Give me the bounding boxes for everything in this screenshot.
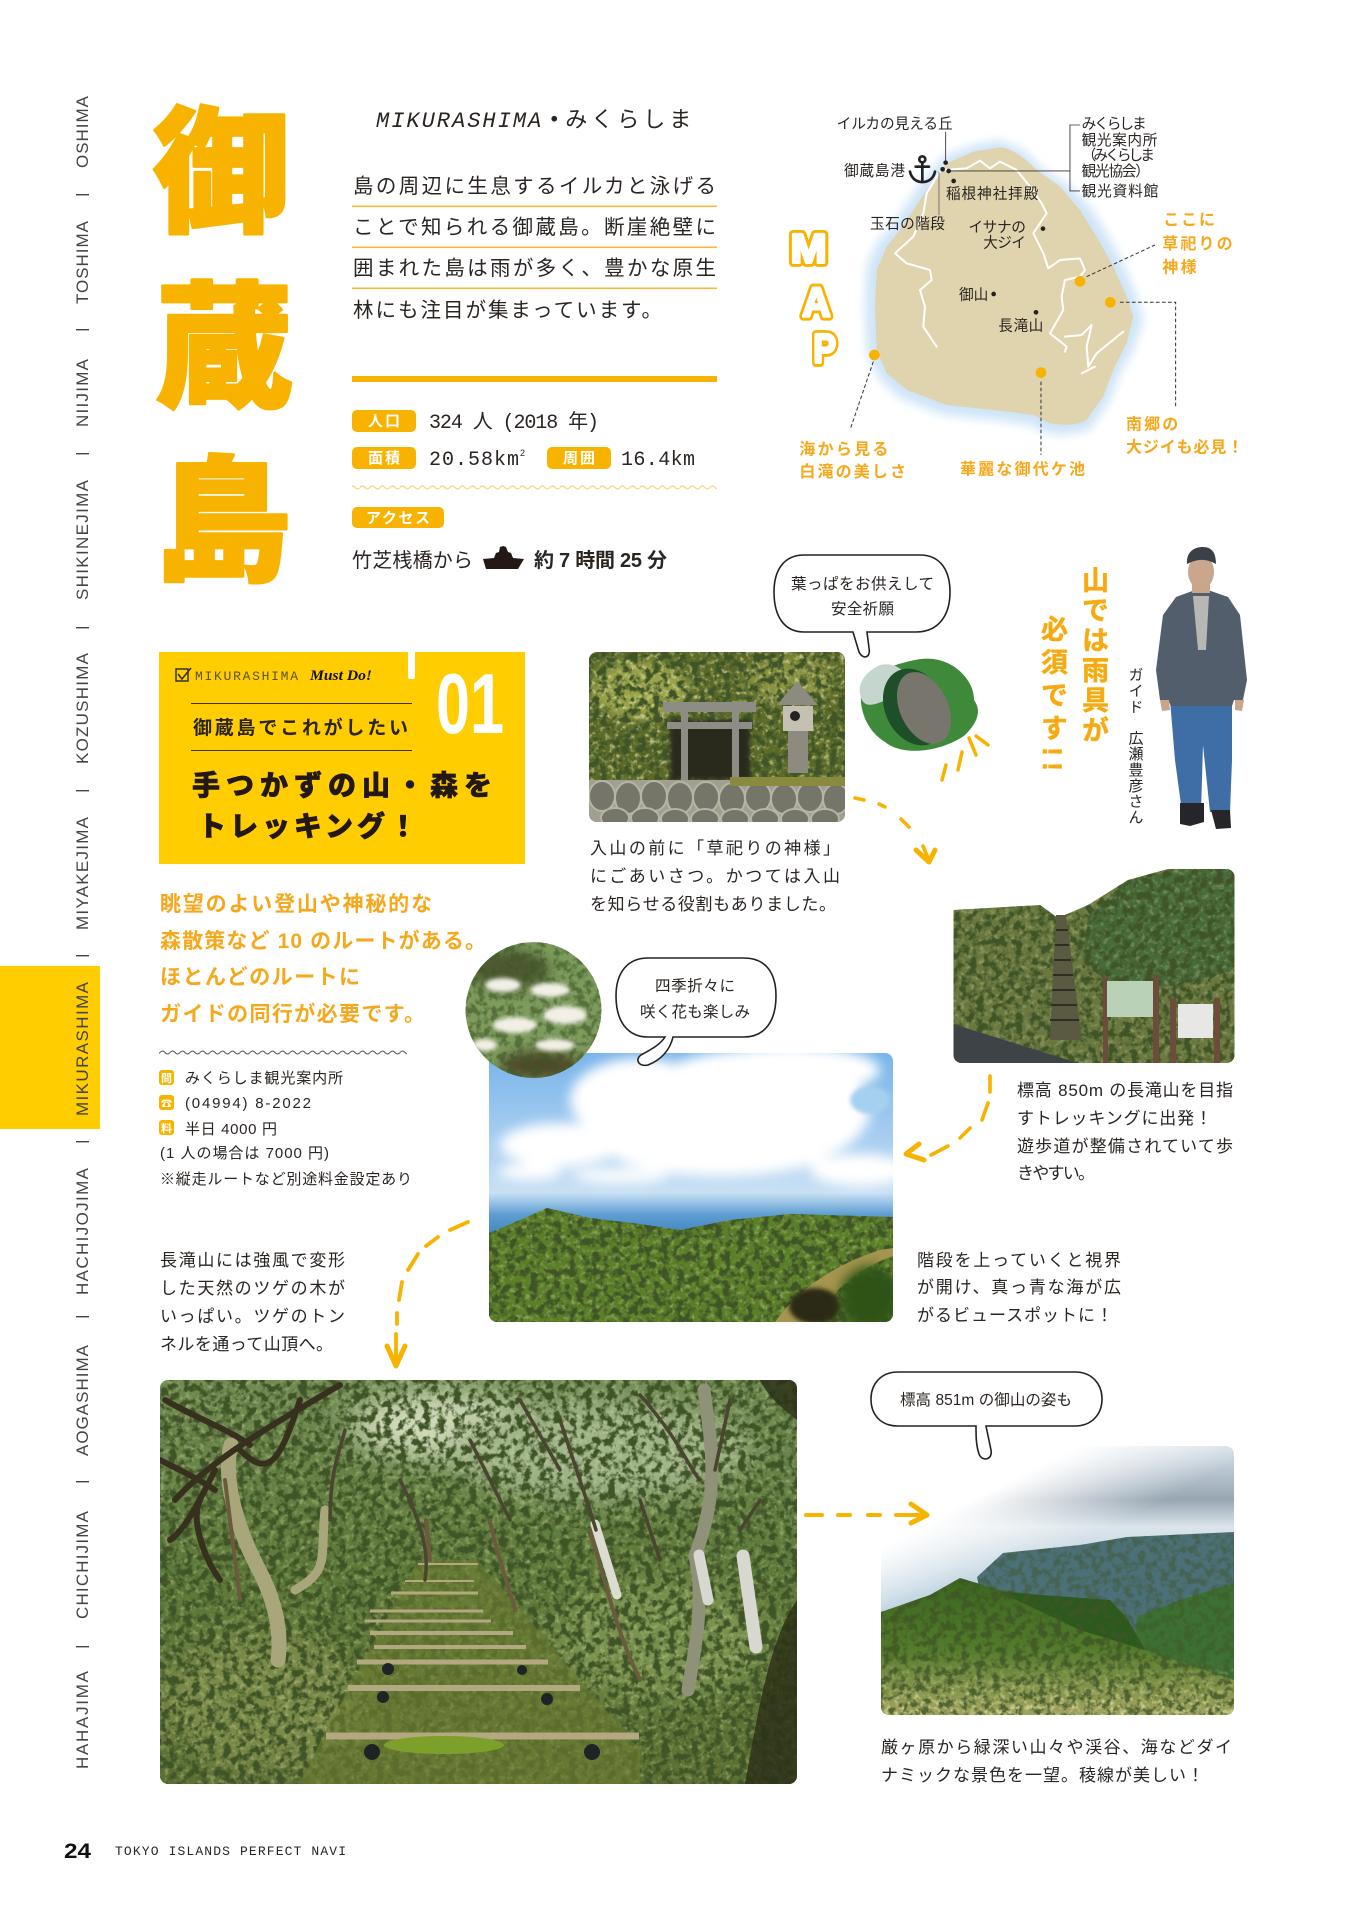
caption: sea view: が開け、真っ青な海が広: [917, 1278, 1121, 1297]
badge: population: [352, 410, 416, 432]
map: highlighted spots: 華麗な御代ケ池: [960, 460, 1085, 478]
map: island: [875, 147, 1133, 425]
access: 竹芝桟橋から: [352, 549, 473, 572]
arrow: stairs to sea view: [906, 1076, 990, 1160]
title: 御蔵島: 御: [153, 98, 289, 250]
intro text block: 囲まれた島は雨が多く、豊かな原生: [353, 257, 716, 280]
sidebar: island index: SHIKINEJIMA: [73, 479, 92, 600]
map: highlighted spots: 草祀りの: [1162, 235, 1233, 253]
sidebar: island index: HACHIJOJIMA: [73, 1167, 92, 1295]
caption: shrine: [590, 839, 840, 914]
caption: stairs: 標高 850m の長滝山を目指: [1017, 1081, 1233, 1100]
sidebar: island index: OSHIMA: [73, 95, 92, 168]
icon: checkbox: [176, 668, 191, 681]
caption: mountain: 厳ヶ原から緑深い山々や渓谷、海などダイ: [881, 1738, 1232, 1757]
map: highlighted spots: [799, 212, 1243, 481]
map: MAP lettering: M: [791, 226, 827, 272]
speech bubble: offering: 安全祈願: [831, 600, 894, 618]
tree trunks: [160, 1385, 760, 1690]
map: spot dots: [869, 276, 1116, 378]
sidebar: island index: CHICHIJIMA: [73, 1510, 92, 1619]
guide name: ガイド 広瀬豊彦さん: [1126, 667, 1144, 825]
caption: boxwood tunnel: いっぱい。ツゲのトン: [160, 1307, 345, 1326]
map: place labels: 御蔵島港: [844, 162, 905, 179]
handwritten note: 必須です!!: [1037, 615, 1068, 777]
stairs: [300, 1560, 640, 1784]
info block: みくらしま観光案内所: [185, 1070, 343, 1087]
map: place labels: イサナの: [968, 220, 1026, 236]
map: MAP lettering: P: [813, 326, 836, 372]
panel: Must Do header: MIKURASHIMA: [195, 669, 298, 684]
info block: 半日 4000 円: [185, 1121, 277, 1138]
facts: population, area, circumference: 20.58km: [429, 449, 519, 472]
badge: population: 人口: [368, 413, 400, 430]
map: place labels: [837, 116, 1158, 335]
panel: Must Do header: Must Do!: [309, 668, 372, 684]
caption: stairs: [1017, 1081, 1233, 1183]
info block: (1 人の場合は 7000 円): [160, 1145, 329, 1162]
intro text block: ことで知られる御蔵島。断崖絶壁に: [353, 216, 716, 239]
map: highlighted spots: 大ジイも必見！: [1126, 439, 1243, 457]
number 01: 01: [436, 657, 504, 752]
map: place labels: 観光資料館: [1082, 183, 1158, 200]
title: 御蔵島: [153, 98, 293, 599]
map: place labels: （みくらしま: [1082, 147, 1155, 164]
facts: population, area, circumference: 2: [520, 448, 525, 458]
caption: stairs: きやすい。: [1017, 1164, 1095, 1183]
icon: fee: [159, 1120, 174, 1135]
badge: circumference: 周囲: [563, 450, 595, 467]
access: [352, 507, 667, 572]
map: place labels: 御山: [959, 286, 988, 303]
speech bubble: offering: [774, 555, 950, 657]
icon: ship: [483, 541, 524, 569]
title: 御蔵島: 蔵: [156, 273, 293, 425]
panel: Must Do header: 御蔵島でこれがしたい: [193, 716, 408, 739]
icon: phone: [159, 1095, 174, 1110]
badge: circumference: [547, 447, 611, 469]
badge: access: [352, 507, 444, 528]
handwritten note: 山では雨具が: [1078, 566, 1108, 746]
icon: phone: ☎: [161, 1098, 172, 1110]
caption: boxwood tunnel: ネルを通って山頂へ。: [160, 1335, 333, 1354]
map: MAP lettering: M: [791, 226, 827, 272]
photo: mountain ridge: [881, 1446, 1234, 1715]
sidebar current island highlight: [0, 966, 100, 1129]
caption: sea view: がるビュースポットに！: [917, 1306, 1113, 1325]
wavy divider: [352, 485, 717, 490]
caption: boxwood tunnel: [160, 1251, 345, 1354]
map: place labels: 大ジイ: [983, 235, 1026, 252]
lead text: ガイドの同行が必要です。: [160, 1002, 425, 1026]
caption: boxwood tunnel: 長滝山には強風で変形: [160, 1251, 345, 1270]
photo: shrine: [589, 652, 849, 829]
panel: Must Do header: トレッキング！: [198, 810, 417, 842]
speech bubble: flowers: 咲く花も楽しみ: [640, 1003, 750, 1021]
speech bubble: flowers: 四季折々に: [655, 977, 735, 995]
icon: inquiry: [159, 1070, 174, 1085]
photo: leaf and stone: [860, 658, 978, 756]
handwritten note: [1037, 566, 1108, 777]
map: MAP lettering: P: [813, 326, 836, 372]
icon: anchor: [910, 156, 935, 182]
map: highlighted spots: 南郷の: [1126, 415, 1178, 433]
access: 約 7 時間 25 分: [534, 549, 667, 572]
torii: [663, 702, 756, 780]
map: place labels: 稲根神社拝殿: [946, 186, 1039, 203]
panel: Must Do header: [159, 648, 525, 864]
intro text block: 島の周辺に生息するイルカと泳げる: [353, 175, 716, 198]
info block: (04994) 8-2022: [185, 1095, 311, 1112]
caption: sea view: 階段を上っていくと視界: [917, 1251, 1121, 1270]
lead text: 眺望のよい登山や神秘的な: [160, 893, 432, 916]
map: leader lines: [850, 125, 1176, 455]
map: MAP lettering: [791, 226, 836, 372]
subtitle: MIKURASHIMA・みくらしま: [376, 107, 695, 134]
info block: [159, 1070, 412, 1188]
stone wall: [589, 780, 845, 822]
map: place labels: 観光協会）: [1082, 163, 1150, 180]
sidebar: island index: AOGASHIMA: [73, 1344, 92, 1456]
map: place labels: 観光案内所: [1082, 132, 1158, 149]
caption: mountain: ナミックな景色を一望。稜線が美しい！: [881, 1766, 1204, 1785]
badge: access: アクセス: [366, 510, 430, 527]
lead text: [160, 893, 486, 1026]
caption: shrine: 入山の前に「草祀りの神様」: [590, 839, 840, 858]
intro text block: 林にも注目が集まっています。: [353, 299, 662, 322]
map: place labels: イルカの見える丘: [837, 116, 953, 133]
caption: sea view: [917, 1251, 1121, 1325]
caption: stairs: すトレッキングに出発！: [1017, 1109, 1212, 1128]
map: place labels: 玉石の階段: [870, 215, 945, 232]
photo: sea view: [489, 1046, 910, 1330]
footer: page number: 24: [64, 1840, 91, 1863]
map: sea glow: [865, 140, 1143, 435]
badge: area: 面積: [368, 449, 400, 467]
map: place labels: 長滝山: [998, 318, 1043, 335]
arrow: sea view to forest: [387, 1222, 468, 1366]
icon: inquiry: 問: [161, 1072, 172, 1085]
photo: flower: [465, 942, 602, 1079]
wavy divider: [159, 1050, 407, 1055]
facts: population, area, circumference: [352, 410, 695, 472]
sidebar: island index: MIKURASHIMA: [73, 981, 92, 1116]
map: [791, 116, 1243, 481]
sidebar: island index: MIYAKEJIMA: [73, 816, 92, 930]
footer: running title: TOKYO ISLANDS PERFECT NAVI: [115, 1844, 346, 1859]
map: highlighted spots: ここに: [1163, 212, 1215, 229]
arrow: shrine to stairs: [855, 798, 935, 862]
sidebar: island index: KOZUSHIMA: [73, 652, 92, 764]
map: place labels: みくらしま: [1082, 117, 1147, 133]
speech bubble: flowers: [616, 958, 776, 1065]
panel: Must Do header: 手つかずの山・森を: [192, 770, 492, 801]
sidebar: island index: HAHAJIMA: [73, 1670, 92, 1769]
icon: fee: 料: [161, 1121, 172, 1135]
speech bubble: mountain: [871, 1372, 1102, 1459]
map: highlighted spots: 神様: [1162, 257, 1197, 276]
arrow: forest to mountain: [806, 1504, 927, 1523]
thick divider: [352, 376, 717, 382]
sidebar: island index: [0, 95, 100, 1769]
sidebar: island index: TOSHIMA: [73, 220, 92, 304]
info block: ※縦走ルートなど別途料金設定あり: [160, 1171, 412, 1188]
caption: boxwood tunnel: した天然のツゲの木が: [160, 1279, 345, 1298]
sidebar: island index: NIIJIMA: [73, 358, 92, 427]
title: 御蔵島: 島: [155, 447, 291, 599]
map: highlighted spots: 海から見る: [799, 440, 888, 458]
caption: mountain: [881, 1738, 1232, 1785]
facts: population, area, circumference: 324 人 (2018 年): [429, 410, 599, 435]
map: highlighted spots: 白滝の美しさ: [799, 463, 906, 481]
stone lantern: [777, 681, 818, 773]
lead text: ほとんどのルートに: [160, 966, 360, 989]
caption: stairs: 遊歩道が整備されていて歩: [1017, 1137, 1233, 1156]
facts: population, area, circumference: 16.4km: [621, 449, 695, 472]
speech bubble: offering: 葉っぱをお供えして: [791, 575, 934, 593]
caption: shrine: を知らせる役割もありました。: [590, 895, 836, 914]
map: MAP lettering: A: [802, 279, 830, 325]
badge: area: [352, 447, 416, 469]
photo: guide: [1156, 547, 1247, 829]
photo: stairs: [953, 869, 1235, 1063]
photo: forest stairs: [160, 1380, 797, 1784]
caption: shrine: にごあいさつ。かつては入山: [590, 867, 840, 886]
map: MAP lettering: A: [802, 279, 830, 325]
lead text: 森散策など 10 のルートがある。: [160, 929, 486, 953]
intro text block: [352, 175, 717, 322]
speech bubble: mountain: 標高 851m の御山の姿も: [900, 1391, 1072, 1409]
icon: rays: [942, 736, 988, 780]
map: trails: [895, 161, 1123, 373]
